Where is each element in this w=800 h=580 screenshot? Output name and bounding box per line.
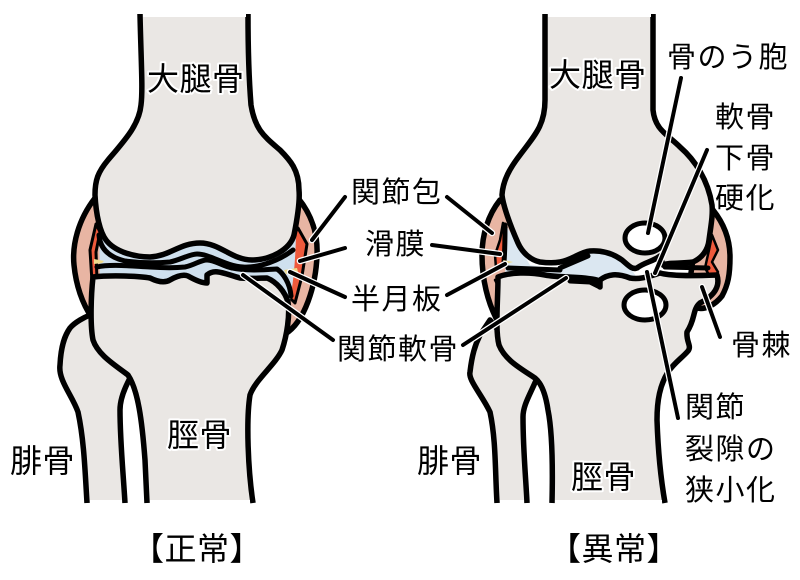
labels: abnormal: 腓骨 [417, 443, 482, 479]
heading: abnormal: 【異常】 [549, 531, 679, 567]
fibula, normal [60, 315, 130, 503]
labels: centre: 半月板 [351, 283, 443, 316]
labels: abnormal: 硬化 [715, 183, 776, 215]
heading: normal: 【正常】 [132, 531, 262, 567]
labels: abnormal: 下骨 [715, 143, 776, 175]
labels: abnormal: 狭小化 [685, 474, 777, 507]
labels: bones, normal: 大腿骨 [147, 61, 245, 97]
labels: abnormal [417, 41, 792, 507]
labels: abnormal: 軟骨 [715, 101, 776, 134]
tibia, normal [91, 272, 289, 503]
panel: normal knee [60, 13, 345, 505]
labels: bones, normal [10, 61, 245, 479]
labels: centre: 関節軟骨 [337, 333, 459, 366]
bone edge clean-up [500, 13, 662, 505]
leader lines, normal [243, 197, 345, 340]
labels: centre: 滑膜 [365, 228, 426, 261]
panel: abnormal knee [432, 13, 730, 505]
synovial fluid and cartilage, normal [99, 225, 296, 300]
labels: centre: 関節包 [351, 176, 443, 209]
labels: abnormal: 裂隙の [685, 433, 777, 466]
labels: abnormal: 脛骨 [571, 459, 636, 495]
tibia, abnormal [497, 273, 718, 503]
joint capsule, abnormal [482, 200, 730, 318]
leader lines, abnormal [432, 78, 720, 418]
synovial fluid and cartilage, abnormal [505, 225, 640, 292]
femur, abnormal [502, 14, 712, 268]
femur, normal [95, 14, 299, 260]
fibula, abnormal [470, 320, 537, 503]
cartilage lines, abnormal [503, 225, 708, 287]
labels: abnormal: 骨棘 [731, 329, 792, 362]
labels: abnormal: 骨のう胞 [667, 41, 789, 74]
labels: centre [337, 176, 459, 366]
joint capsule, normal [74, 198, 317, 334]
labels: bones, normal: 腓骨 [10, 443, 75, 479]
cartilage lines, normal [94, 235, 298, 296]
bone edge clean-up [90, 13, 250, 505]
bone cysts [624, 223, 666, 320]
labels: abnormal: 大腿骨 [549, 57, 647, 93]
labels: bones, normal: 脛骨 [167, 417, 232, 453]
labels: abnormal: 関節 [685, 391, 746, 424]
